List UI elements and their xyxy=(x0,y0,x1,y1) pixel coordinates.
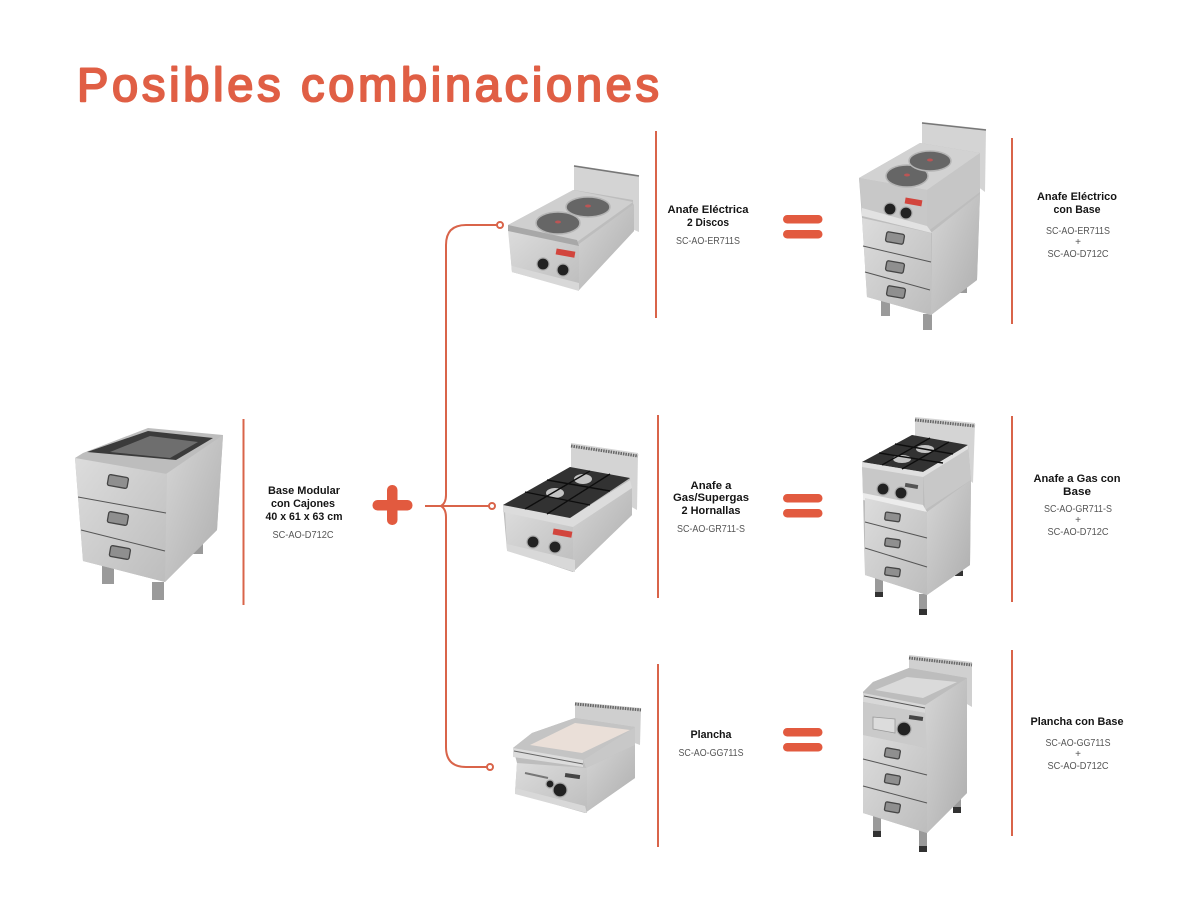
label: anafe eléctrico con base: SC-AO-D712C xyxy=(1048,249,1108,260)
label: plancha: SC-AO-GG711S xyxy=(678,748,744,759)
label: base modular: con Cajones xyxy=(271,498,335,510)
label: anafe a gas: 2 Hornallas xyxy=(682,505,740,517)
label: anafe a gas con base: SC-AO-GR711-S xyxy=(1044,504,1112,515)
label: base modular: 40 x 61 x 63 cm xyxy=(266,511,343,523)
divider xyxy=(657,664,659,847)
connector arrows xyxy=(425,222,503,770)
icon: equals xyxy=(783,494,822,518)
label: anafe eléctrico con base: + xyxy=(1075,237,1081,248)
label: anafe eléctrico con base: Anafe Eléctrico xyxy=(1037,191,1117,203)
panel: row plancha xyxy=(513,650,1124,852)
divider xyxy=(1011,650,1013,836)
divider xyxy=(655,131,657,318)
image: anafe eléctrica xyxy=(508,165,639,291)
image: anafe a gas xyxy=(503,443,638,572)
label: anafe eléctrico con base: con Base xyxy=(1054,204,1100,216)
label: anafe a gas: SC-AO-GR711-S xyxy=(677,524,745,535)
icon: equals xyxy=(783,728,822,752)
label: plancha con base xyxy=(1030,716,1124,772)
title: Posibles combinaciones xyxy=(77,58,659,111)
label: anafe a gas con base: + xyxy=(1075,515,1081,526)
label: plancha con base: SC-AO-D712C xyxy=(1048,761,1108,772)
label: plancha con base: Plancha con Base xyxy=(1030,716,1124,728)
label: anafe eléctrica: Anafe Eléctrica xyxy=(668,204,749,216)
label: anafe eléctrica xyxy=(668,204,749,247)
divider xyxy=(242,419,244,605)
divider xyxy=(1011,416,1013,602)
label: anafe a gas con base xyxy=(1034,473,1121,538)
image: anafe eléctrico con base xyxy=(859,122,986,330)
image: anafe a gas con base xyxy=(862,417,975,615)
label: anafe a gas con base: Base xyxy=(1063,486,1091,498)
label: anafe eléctrica: 2 Discos xyxy=(687,217,729,229)
icon: equals xyxy=(783,215,822,238)
label: plancha: Plancha xyxy=(690,729,732,741)
divider xyxy=(1011,138,1013,324)
label: plancha con base: SC-AO-GG711S xyxy=(1046,738,1111,749)
label: anafe eléctrico con base xyxy=(1037,191,1117,260)
label: anafe a gas con base: SC-AO-D712C xyxy=(1048,527,1108,538)
label: base modular: Base Modular xyxy=(268,485,341,497)
panel: row electric xyxy=(508,122,1117,330)
image: base modular con cajones xyxy=(75,428,223,600)
label: plancha xyxy=(678,729,744,759)
label: plancha con base: + xyxy=(1075,749,1081,760)
label: anafe eléctrico con base: SC-AO-ER711S xyxy=(1046,226,1110,237)
label: anafe eléctrica: SC-AO-ER711S xyxy=(676,236,740,247)
divider xyxy=(657,415,659,598)
panel: base module xyxy=(75,419,343,605)
label: anafe a gas xyxy=(673,480,749,535)
icon: plus xyxy=(372,485,412,525)
label: anafe a gas: Gas/Supergas xyxy=(673,492,749,504)
image: plancha con base xyxy=(863,655,972,852)
label: base modular xyxy=(266,485,343,541)
label: anafe a gas: Anafe a xyxy=(690,480,732,492)
label: base modular: SC-AO-D712C xyxy=(272,530,334,541)
label: anafe a gas con base: Anafe a Gas con xyxy=(1034,473,1121,485)
image: plancha xyxy=(513,702,641,813)
panel: row gas xyxy=(503,415,1121,615)
